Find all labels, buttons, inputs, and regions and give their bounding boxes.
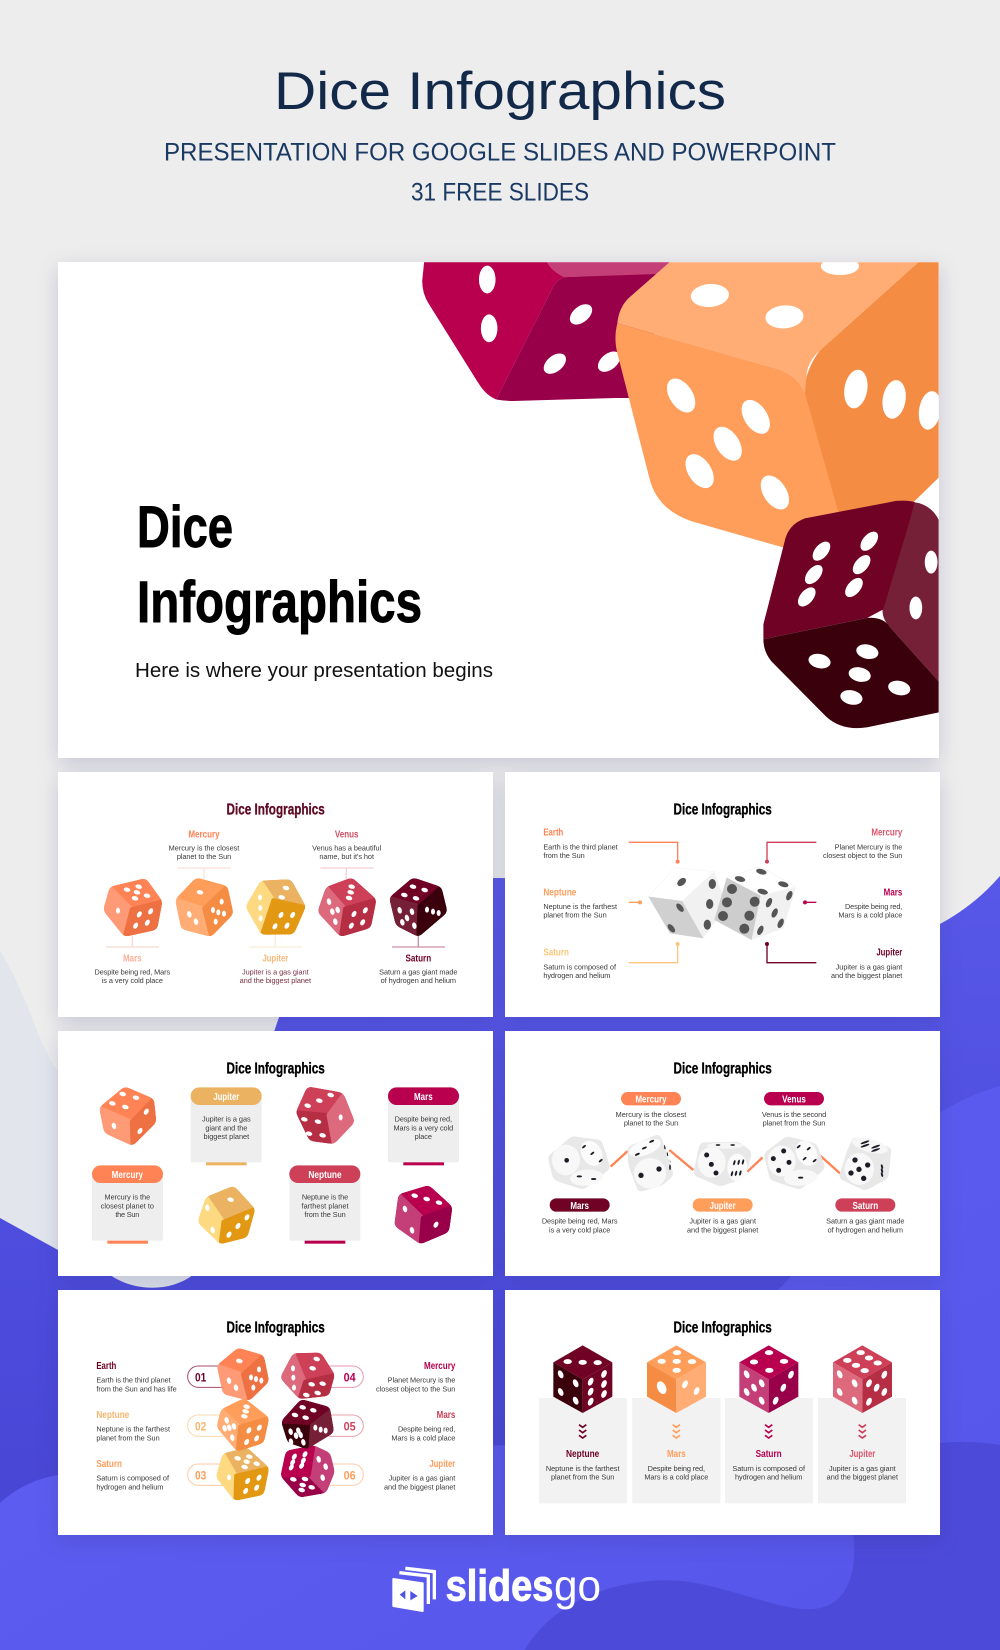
label: Saturn: of hydrogen and helium	[828, 1225, 903, 1234]
die: right white	[714, 867, 796, 940]
column: Mars: Mars is a cold place	[644, 1473, 708, 1482]
label: Saturn: of hydrogen and helium	[381, 976, 456, 985]
item: Neptune: Neptune is the farthest	[96, 1425, 170, 1434]
card: Jupiter: Jupiter	[213, 1092, 239, 1103]
cover title	[137, 495, 422, 635]
isometric die: red	[833, 1345, 892, 1413]
number pill 04	[320, 1366, 363, 1387]
card: Neptune: Neptune	[308, 1170, 342, 1181]
icon: orange die	[615, 257, 943, 550]
item: Mercury	[376, 1361, 456, 1393]
die: orange-red	[101, 1088, 155, 1144]
label: Saturn: Saturn	[405, 953, 431, 964]
die: orange-red	[105, 880, 161, 935]
label: Jupiter: Jupiter	[262, 953, 288, 964]
panel: slide two white dice with callouts	[505, 772, 940, 1017]
label: Mars: Mars	[570, 1201, 589, 1212]
card: Jupiter	[191, 1087, 262, 1165]
callout: Mars: Despite being red,	[845, 902, 902, 911]
logo wordmark: go	[554, 1561, 601, 1610]
item: Saturn: Saturn is composed of	[96, 1474, 170, 1483]
card: Jupiter: Jupiter is a gas	[202, 1115, 251, 1124]
callout: Jupiter: and the biggest planet	[831, 971, 902, 980]
label: Mars: Mars	[123, 953, 142, 964]
number pill 06	[320, 1464, 363, 1485]
item: Earth: from the Sun and has life	[96, 1384, 177, 1393]
label: Jupiter: and the biggest planet	[687, 1225, 758, 1234]
callout: Earth: from the Sun	[543, 851, 585, 860]
column: Neptune	[539, 1345, 627, 1503]
label: Venus	[762, 1092, 826, 1128]
isometric die: magenta	[739, 1345, 798, 1413]
column: Neptune: Neptune	[566, 1449, 600, 1460]
card: Mercury: Mercury is the	[104, 1193, 150, 1202]
callout: Earth: Earth	[543, 828, 563, 839]
die: white five	[838, 1134, 892, 1191]
label: Venus: Venus has a beautiful	[312, 843, 382, 852]
die: white one	[547, 1136, 611, 1190]
callout: Neptune	[543, 887, 642, 920]
card: Jupiter: biggest planet	[203, 1132, 249, 1141]
die: white four	[763, 1136, 826, 1190]
label: Venus: name, but it's hot	[319, 852, 374, 861]
card: Mars: Mars	[414, 1092, 433, 1103]
die: magenta	[396, 1187, 451, 1242]
panel: slide numbered dice columns	[58, 1290, 493, 1535]
column: Saturn: Saturn	[756, 1449, 782, 1460]
label: Venus: planet from the Sun	[763, 1119, 825, 1128]
item: Mercury: Planet Mercury is the	[388, 1376, 455, 1385]
callout: Saturn	[543, 942, 680, 980]
label: Jupiter: Jupiter is a gas giant	[689, 1217, 756, 1226]
item: Jupiter: Jupiter	[429, 1459, 455, 1470]
panel: slide chain of white dice	[505, 1031, 940, 1276]
number pill 03	[188, 1464, 231, 1485]
card: Neptune	[289, 1165, 360, 1244]
label: Venus	[312, 829, 382, 861]
column: Saturn: hydrogen and helium	[735, 1473, 802, 1482]
card: Jupiter: giant and the	[205, 1123, 247, 1132]
chevrons	[859, 1425, 866, 1438]
column: Mars: Despite being red,	[648, 1464, 705, 1473]
label: Mercury: planet to the Sun	[624, 1119, 678, 1128]
column: Saturn	[725, 1345, 813, 1503]
die 04	[282, 1354, 333, 1398]
die: dark	[391, 879, 446, 935]
label: Saturn: Saturn	[852, 1201, 878, 1212]
card: Mercury	[92, 1165, 163, 1244]
number pill 01	[188, 1366, 231, 1387]
card: Mars: Despite being red,	[395, 1115, 452, 1124]
item: Mercury: closest object to the Sun	[376, 1384, 455, 1393]
cover subtitle: Here is where your presentation begins	[135, 660, 493, 682]
isometric die: orange	[647, 1345, 706, 1413]
label: Mars: Despite being red, Mars	[94, 967, 170, 976]
column: Mars	[632, 1345, 720, 1503]
label: Saturn: Saturn a gas giant made	[826, 1217, 904, 1226]
label: Jupiter: Jupiter is a gas giant	[242, 967, 309, 976]
item: Earth: Earth	[96, 1361, 116, 1372]
isometric die: dark	[553, 1345, 612, 1413]
callout: Neptune: Neptune is the farthest	[543, 902, 617, 911]
slide title: Dice Infographics	[226, 1060, 325, 1077]
item: Saturn	[96, 1459, 170, 1491]
die: white three	[693, 1142, 752, 1187]
icon: magenta die	[422, 262, 670, 401]
die 06	[282, 1447, 333, 1496]
column: Neptune: Neptune is the farthest	[546, 1464, 619, 1473]
panel: slide isometric dice over cards	[505, 1290, 940, 1535]
slide title: Dice Infographics	[226, 1319, 325, 1336]
number pill 04: 04	[344, 1371, 356, 1385]
item: Saturn: Saturn	[96, 1459, 122, 1470]
number pill 01: 01	[195, 1371, 207, 1385]
chevrons	[673, 1425, 680, 1438]
callout: Mars: Mars is a cold place	[838, 911, 902, 920]
panel: cover slide	[136, 262, 939, 728]
number pill 06: 06	[344, 1469, 356, 1483]
die 03	[218, 1449, 267, 1499]
column: Jupiter: and the biggest planet	[827, 1473, 898, 1482]
callout: Saturn: Saturn is composed of	[543, 962, 617, 971]
label: Saturn	[379, 953, 457, 985]
number pill 03: 03	[195, 1469, 207, 1483]
callout: Earth: Earth is the third planet	[543, 842, 618, 851]
slide title: Dice Infographics	[673, 1319, 772, 1336]
label: Jupiter: Jupiter	[710, 1201, 736, 1212]
card: Neptune: from the Sun	[304, 1210, 346, 1219]
label: Jupiter	[687, 1198, 758, 1234]
cover title: Infographics	[137, 570, 422, 635]
item: Jupiter	[384, 1459, 455, 1491]
panel: slide dice and cards grid	[58, 1031, 493, 1276]
label: Jupiter	[240, 953, 311, 985]
column: Jupiter	[818, 1345, 906, 1503]
die: white two	[627, 1133, 674, 1193]
number pill 02: 02	[195, 1420, 207, 1434]
connector lines	[611, 1150, 840, 1173]
label: Venus: Venus	[335, 829, 359, 840]
die: red	[298, 1088, 353, 1142]
column: Mars: Mars	[667, 1449, 686, 1460]
number pill 02	[188, 1415, 231, 1436]
card: Mars: place	[415, 1132, 432, 1141]
callout: Mars: Mars	[884, 887, 903, 898]
label: Mercury	[616, 1092, 686, 1128]
label: Mercury: Mercury is the closest	[616, 1110, 686, 1119]
slide title: Dice Infographics	[673, 801, 772, 818]
slide title: Dice Infographics	[226, 801, 325, 818]
slide title: Dice Infographics	[673, 1060, 772, 1077]
label: Saturn	[826, 1198, 904, 1234]
column: Jupiter: Jupiter is a gas giant	[829, 1464, 896, 1473]
label: Mercury: planet to the Sun	[177, 852, 231, 861]
number pill 05	[320, 1415, 363, 1436]
column: Jupiter: Jupiter	[849, 1449, 875, 1460]
card: Mercury: Mercury	[112, 1170, 143, 1181]
column: Saturn: Saturn is composed of	[732, 1464, 806, 1473]
callout: Saturn: hydrogen and helium	[543, 971, 610, 980]
label: Venus: Venus	[782, 1094, 806, 1105]
card: Mars	[388, 1087, 459, 1165]
callout: Neptune: Neptune	[543, 887, 577, 898]
label: Mercury: Mercury is the closest	[169, 843, 239, 852]
item: Earth	[96, 1361, 177, 1393]
label: Venus: Venus is the second	[762, 1110, 826, 1119]
card: Neptune: farthest planet	[301, 1201, 348, 1210]
label: Mercury: Mercury	[635, 1094, 667, 1105]
die: left white	[648, 868, 727, 938]
item: Neptune: planet from the Sun	[96, 1433, 160, 1442]
callout: Jupiter: Jupiter is a gas giant	[836, 962, 902, 971]
die 05	[283, 1401, 332, 1447]
label: Mercury	[169, 829, 239, 861]
label: Mercury: Mercury	[188, 829, 220, 840]
item: Mars	[391, 1410, 456, 1442]
label: Mars: is a very cold place	[549, 1225, 610, 1234]
card: Mercury: the Sun	[115, 1210, 139, 1219]
callout: Jupiter	[765, 942, 902, 980]
label: Saturn: Saturn a gas giant made	[379, 967, 457, 976]
card: Mercury: closest planet to	[101, 1201, 154, 1210]
label: Mars: is a very cold place	[102, 976, 163, 985]
label: Mars	[542, 1198, 618, 1234]
item: Mars: Mars is a cold place	[391, 1433, 455, 1442]
item: Saturn: hydrogen and helium	[96, 1482, 163, 1491]
die: yellow	[199, 1188, 253, 1242]
chevrons	[765, 1425, 772, 1438]
callout: Neptune: planet from the Sun	[543, 911, 607, 920]
label: Mars	[94, 953, 170, 985]
card: Neptune: Neptune is the	[302, 1193, 348, 1202]
label: Jupiter: and the biggest planet	[240, 976, 311, 985]
item: Jupiter: and the biggest planet	[384, 1482, 455, 1491]
callout: Jupiter: Jupiter	[876, 948, 902, 959]
label: Mars: Despite being red, Mars	[542, 1217, 618, 1226]
icon: slide stack	[393, 1568, 434, 1611]
die 01	[219, 1350, 267, 1399]
column: Neptune: planet from the Sun	[551, 1473, 614, 1482]
item: Jupiter: Jupiter is a gas giant	[389, 1474, 455, 1483]
number pill 05: 05	[344, 1420, 356, 1434]
item: Earth: Earth is the third planet	[96, 1376, 171, 1385]
callout: Mercury: Mercury	[871, 828, 903, 839]
callout: Earth	[543, 828, 680, 864]
die: yellow	[247, 881, 304, 933]
item: Mars: Mars	[437, 1410, 456, 1421]
connector lines	[106, 868, 445, 947]
cover dice illustration	[422, 257, 943, 728]
page title: Dice Infographics	[274, 62, 726, 121]
die: red	[319, 879, 375, 935]
callout: Mars	[803, 887, 903, 920]
panel: slide five dice in a row	[58, 772, 493, 1017]
card: Mars: Mars is a very cold	[393, 1123, 453, 1132]
die 02	[218, 1400, 267, 1450]
item: Mercury: Mercury	[424, 1361, 456, 1372]
callout: Mercury: Planet Mercury is the	[835, 842, 902, 851]
logo: slidesgo	[393, 1561, 601, 1611]
icon: dark die	[763, 501, 939, 728]
slide count: 31 FREE SLIDES	[411, 178, 589, 206]
chevrons	[579, 1425, 586, 1438]
subtitle: PRESENTATION FOR GOOGLE SLIDES AND POWERPOINT	[164, 138, 836, 166]
logo wordmark: slides	[446, 1561, 553, 1610]
callout: Mercury	[765, 828, 903, 864]
item: Mars: Despite being red,	[398, 1425, 455, 1434]
item: Neptune: Neptune	[96, 1410, 130, 1421]
callout: Saturn: Saturn	[543, 948, 569, 959]
callout: Mercury: closest object to the Sun	[823, 851, 902, 860]
item: Neptune	[96, 1410, 170, 1442]
cover title: Dice	[137, 495, 233, 560]
die: orange	[177, 879, 232, 935]
